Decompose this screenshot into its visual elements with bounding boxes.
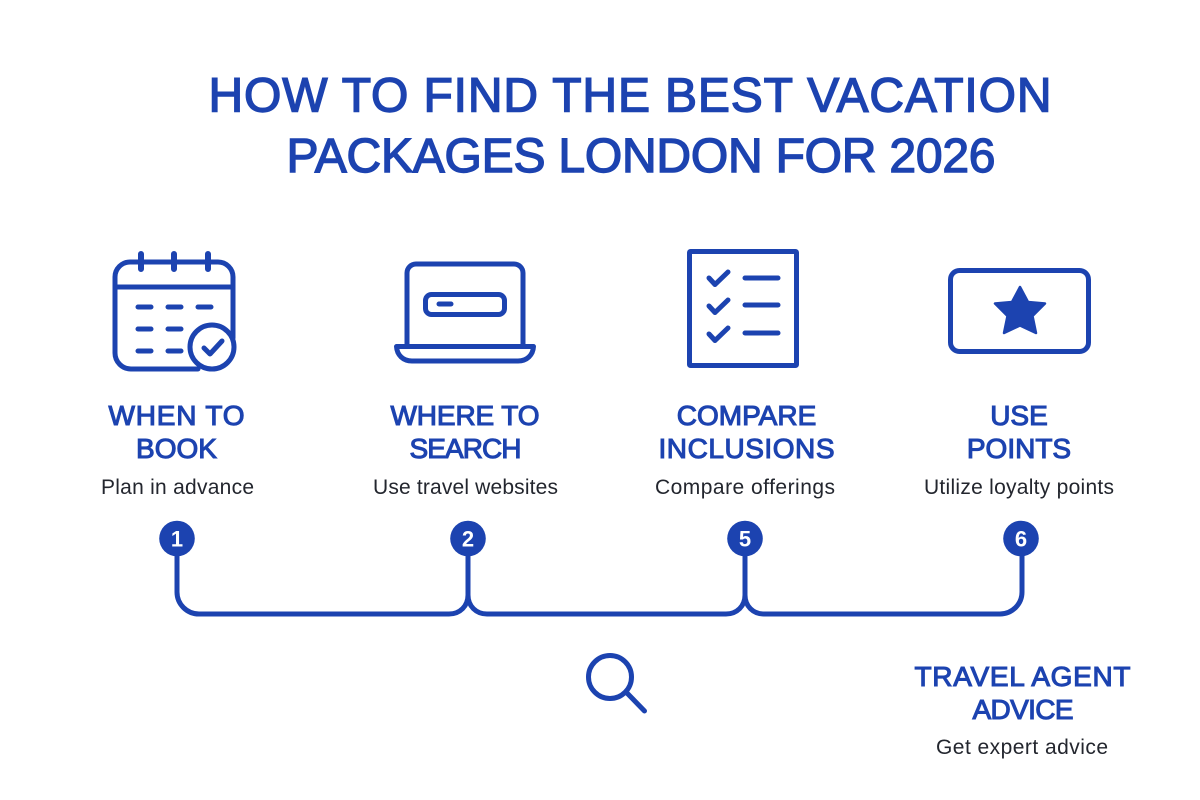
icon: star: [995, 287, 1045, 333]
number badge 1: [159, 521, 195, 556]
step 4 text: USE: [990, 400, 1048, 431]
connector timeline: [177, 556, 1022, 614]
step 1 text: Plan in advance: [101, 476, 254, 499]
number badge 5: [727, 521, 763, 556]
travel agent advice text: TRAVEL AGENT: [914, 661, 1130, 692]
step 4 text: POINTS: [967, 433, 1071, 464]
step 3 text: Compare offerings: [655, 476, 835, 499]
number badge 1: 1: [171, 526, 183, 552]
step 2 text: [373, 400, 558, 499]
icon: laptop with search bar: [396, 264, 534, 361]
icon: calendar with check: [115, 254, 234, 369]
travel agent advice text: Get expert advice: [936, 736, 1108, 759]
title: PACKAGES LONDON FOR 2026: [286, 130, 996, 183]
number badge 6: 6: [1015, 526, 1027, 552]
step 1 text: [101, 400, 254, 499]
title: HOW TO FIND THE BEST VACATION: [208, 70, 1052, 122]
step 4 text: Utilize loyalty points: [924, 476, 1114, 499]
step 1 text: BOOK: [136, 433, 217, 464]
number badge 2: 2: [462, 526, 474, 552]
step 4 text: [924, 400, 1114, 499]
step 2 text: Use travel websites: [373, 476, 558, 499]
step 1 text: WHEN TO: [108, 400, 244, 431]
icon: checklist document: [690, 252, 796, 366]
title: [208, 70, 1052, 183]
travel agent advice text: [914, 661, 1130, 759]
step 2 text: WHERE TO: [390, 400, 540, 431]
number badge 5: 5: [739, 526, 751, 552]
icon: magnifying glass: [588, 656, 644, 711]
step 3 text: [655, 400, 835, 499]
travel agent advice text: ADVICE: [972, 694, 1074, 725]
number badge 6: [1003, 521, 1039, 556]
step 2 text: SEARCH: [410, 433, 522, 464]
step 3 text: COMPARE: [677, 400, 816, 431]
icon: loyalty card with star: [950, 270, 1088, 352]
number badge 2: [450, 521, 486, 556]
step 3 text: INCLUSIONS: [658, 433, 834, 464]
